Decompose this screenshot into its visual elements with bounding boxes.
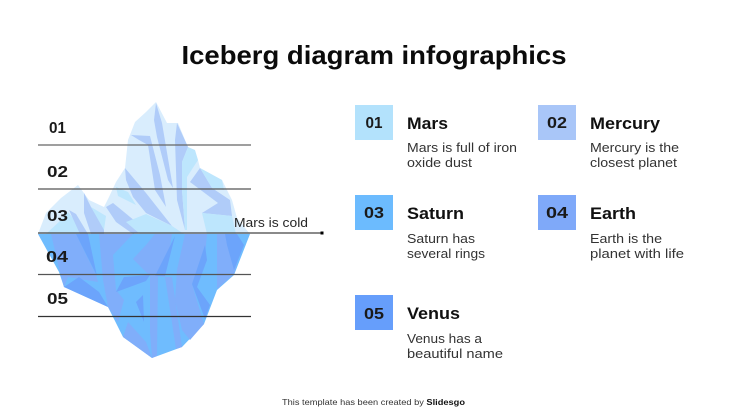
level labels: 05 <box>47 291 68 308</box>
level labels: 01 <box>49 120 66 137</box>
footer credit: This template has been created by Slidesgo <box>282 397 465 407</box>
item 02: Mercury: Mercury is the <box>590 141 679 155</box>
item 01: Mars: Mars is full of iron <box>407 141 517 155</box>
item 02: Mercury: closest planet <box>590 156 678 170</box>
item 02: Mercury <box>538 105 679 170</box>
item 01: Mars: 01 <box>366 115 383 132</box>
item 02: Mercury: 02 <box>547 115 567 132</box>
iceberg diagram <box>38 102 324 358</box>
item 04: Earth <box>538 195 684 261</box>
item 04: Earth: Earth <box>590 205 636 223</box>
item 05: Venus: beautiful name <box>407 347 503 361</box>
leader dot <box>320 232 324 234</box>
item 03: Saturn: 03 <box>364 205 384 222</box>
item 05: Venus <box>355 295 503 361</box>
level lines <box>38 145 322 316</box>
item 02: Mercury: Mercury <box>590 115 661 133</box>
item 03: Saturn <box>355 195 485 261</box>
callout: Mars is cold: Mars is cold <box>234 216 308 230</box>
level labels: 02 <box>47 164 68 181</box>
item 05: Venus: 05 <box>364 306 384 323</box>
item 01: Mars: oxide dust <box>407 156 473 170</box>
item 04: Earth: Earth is the <box>590 232 662 246</box>
item 03: Saturn: Saturn <box>407 205 464 223</box>
level labels: 03 <box>47 208 68 225</box>
level labels <box>46 120 68 308</box>
item 04: Earth: planet with life <box>590 247 684 261</box>
iceberg below water <box>38 234 250 358</box>
iceberg above water <box>38 102 250 234</box>
item 04: Earth: 04 <box>546 205 568 222</box>
item 03: Saturn: Saturn has <box>407 232 475 246</box>
item 05: Venus: Venus <box>407 305 460 323</box>
item 01: Mars <box>355 105 517 170</box>
title: Iceberg diagram infographics <box>182 40 566 70</box>
item 01: Mars: Mars <box>407 115 448 133</box>
item 05: Venus: Venus has a <box>407 332 482 346</box>
item 03: Saturn: several rings <box>407 247 485 261</box>
level labels: 04 <box>46 249 68 266</box>
